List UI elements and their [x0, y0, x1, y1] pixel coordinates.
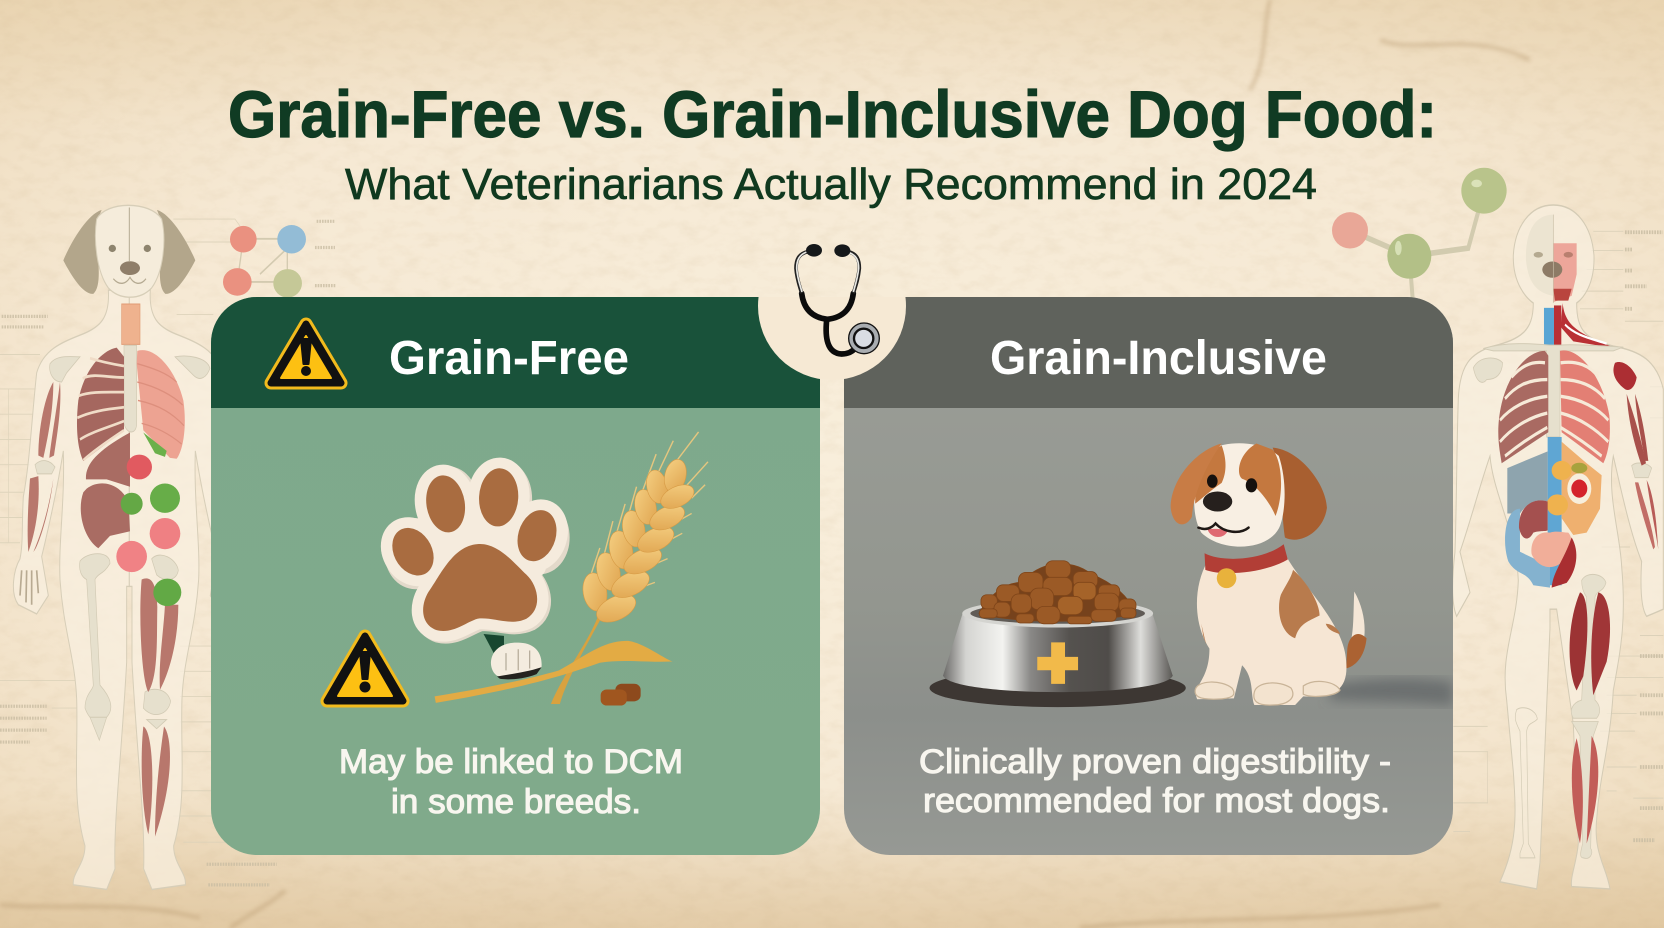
wheat awns	[590, 432, 708, 586]
head	[1194, 443, 1285, 547]
coloured pills	[116, 455, 181, 606]
abdominal organs	[1505, 437, 1602, 588]
clavicle and shoulder bones	[1473, 344, 1652, 858]
body	[1196, 557, 1346, 705]
text: grain-free caption	[339, 743, 683, 821]
title line: Grain-Free vs. Grain-Inclusive Dog Food:	[228, 77, 1437, 151]
molecule nodes	[223, 225, 306, 298]
mouth	[1198, 523, 1249, 532]
bowl inner	[970, 603, 1145, 624]
paw dark pad stem	[484, 634, 504, 657]
illustration: bowl of kibble	[930, 561, 1186, 707]
panel body	[844, 297, 1453, 855]
kibble pile	[979, 561, 1136, 624]
centre notch	[758, 297, 906, 379]
liver and stomach	[81, 433, 130, 548]
face detail	[1526, 215, 1577, 303]
bowl body	[943, 613, 1173, 692]
icon: lower warning triangle	[327, 636, 403, 701]
faint annotation dashes	[0, 221, 336, 885]
right lung pink	[137, 350, 185, 459]
neck vessels	[1544, 303, 1617, 348]
molecule links	[237, 239, 292, 282]
rib cages	[1498, 350, 1610, 463]
body outline	[1453, 205, 1663, 889]
subtitle line: What Veterinarians Actually Recommend in 2024	[345, 160, 1317, 209]
paw outer shadow	[396, 470, 558, 633]
icon: bowl cross	[1037, 642, 1078, 684]
molecule	[1332, 168, 1507, 298]
panel: grain-free	[211, 297, 820, 855]
collar tag	[1217, 568, 1236, 588]
panel: grain-inclusive	[844, 297, 1453, 855]
wheat stalk and leaf	[435, 617, 672, 704]
body outline	[13, 290, 245, 889]
chest piece	[849, 323, 879, 354]
right ear	[1273, 448, 1327, 540]
floor shadow	[1330, 678, 1453, 706]
panel body	[211, 297, 820, 855]
illustration: puppy	[1171, 443, 1367, 705]
panel header band	[844, 297, 1453, 408]
hand bones	[20, 570, 38, 605]
text: grain-inclusive caption: recommended for most dogs.	[923, 782, 1390, 820]
kibble pieces	[601, 684, 641, 706]
leg muscles	[1570, 592, 1610, 844]
title	[228, 77, 1437, 209]
icon: stethoscope	[796, 244, 879, 354]
left lung dark	[77, 348, 124, 461]
collar	[1205, 544, 1288, 573]
nose	[1203, 492, 1232, 511]
left anatomy figure with pills and molecule	[0, 205, 336, 889]
icon: header warning triangle	[271, 324, 341, 383]
faint annotation dashes	[1625, 232, 1663, 840]
left ear	[1171, 443, 1222, 524]
eyes	[1207, 475, 1257, 492]
bowl base	[930, 669, 1186, 707]
bones	[35, 304, 210, 740]
heading: grain-inclusive: Grain-Inclusive	[990, 332, 1327, 385]
text: grain-free caption: in some breeds.	[391, 783, 641, 821]
white paw tip	[491, 643, 542, 679]
right anatomy figure with molecule	[1332, 168, 1663, 889]
heading: grain-free: Grain-Free	[389, 332, 629, 385]
dog head	[63, 205, 195, 297]
earpieces	[806, 244, 850, 257]
paw cream base	[384, 467, 562, 631]
text: grain-inclusive caption: Clinically proven digestibility -	[919, 743, 1391, 781]
small green organ	[143, 433, 167, 457]
metal arms	[796, 252, 859, 293]
wheat kernels	[580, 457, 698, 628]
head patches	[1195, 443, 1281, 516]
tail	[1346, 591, 1367, 669]
tongue	[1207, 529, 1228, 537]
text: grain-free caption: May be linked to DCM	[339, 743, 683, 781]
illustration: paw with wheat	[384, 432, 708, 706]
text: grain-inclusive caption	[919, 743, 1391, 820]
arm and leg muscles	[28, 382, 178, 837]
panel header band	[211, 297, 820, 408]
body patches	[1201, 570, 1340, 644]
arm muscles	[1613, 362, 1658, 549]
leader lines	[0, 219, 240, 842]
paws	[1195, 681, 1340, 705]
tubing	[802, 293, 856, 354]
leader lines	[1453, 231, 1663, 832]
bowl rim	[962, 599, 1153, 628]
paw brown pads	[384, 467, 562, 631]
